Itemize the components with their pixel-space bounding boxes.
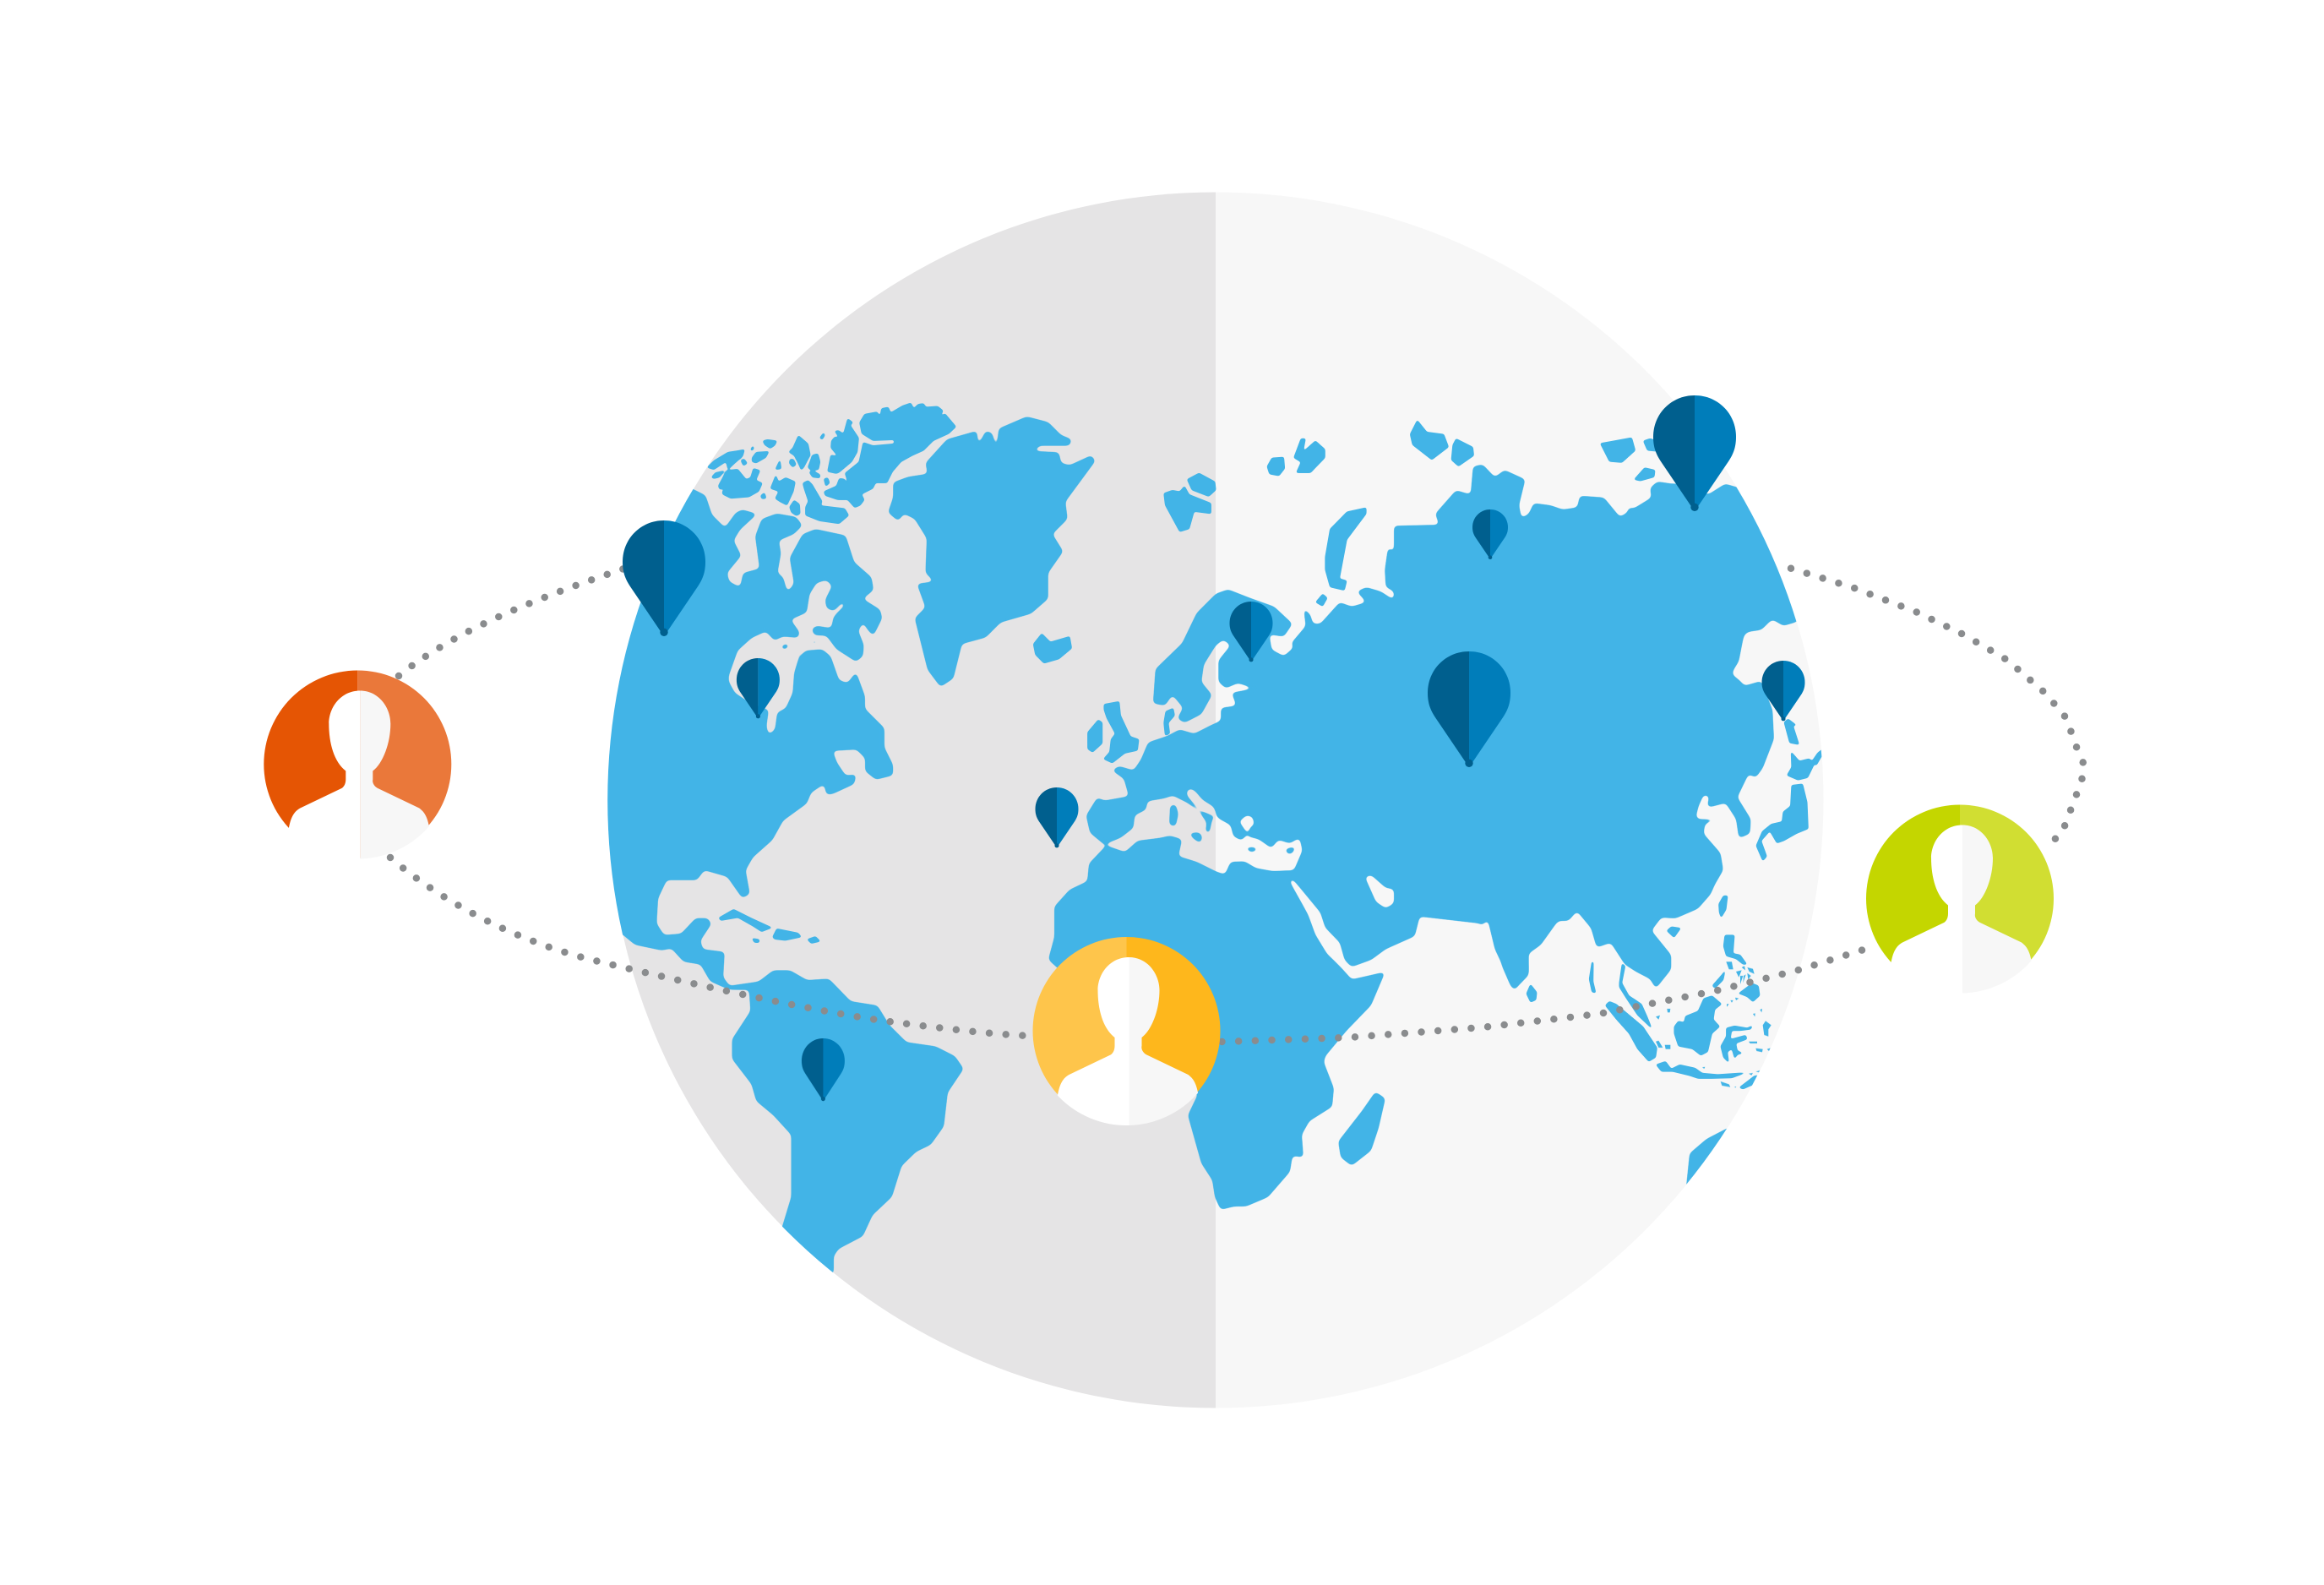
map pin: Hudson Bay xyxy=(737,658,780,718)
Borneo xyxy=(1674,995,1722,1055)
dotted orbit: rear right arc xyxy=(1791,569,2083,844)
Severnaya Zemlya xyxy=(1410,420,1449,460)
map pin: northern Siberia xyxy=(1472,509,1508,559)
Kolguev xyxy=(1316,594,1327,607)
Mindanao xyxy=(1738,983,1760,1002)
Honshu xyxy=(1756,784,1809,861)
Central and South America xyxy=(622,918,963,1272)
islands and archipelagos xyxy=(707,403,1824,1089)
avatar: green person xyxy=(1866,804,2054,994)
Canadian Arctic islands xyxy=(707,449,745,470)
Greenland xyxy=(888,417,1096,687)
world map continents xyxy=(548,403,1824,1276)
Great Britain xyxy=(1103,701,1139,763)
Palawan xyxy=(1712,969,1726,989)
Svalbard xyxy=(1163,486,1211,532)
Luzon xyxy=(1723,935,1747,965)
Eurasia xyxy=(1086,464,1798,990)
Iceland xyxy=(1033,633,1072,663)
Taiwan xyxy=(1718,896,1728,918)
map pin: South America xyxy=(802,1038,845,1101)
Ellesmere and Baffin xyxy=(824,403,956,508)
Kuril chain xyxy=(1812,748,1824,765)
Timor xyxy=(1739,1076,1760,1089)
Denmark xyxy=(1163,708,1175,736)
Sumatra xyxy=(1605,1001,1657,1062)
Puerto Rico xyxy=(807,936,820,944)
dotted orbit: rear left arc xyxy=(399,559,652,676)
Sri Lanka xyxy=(1527,984,1537,1002)
Africa xyxy=(1048,760,1385,1210)
Cuba xyxy=(719,909,772,932)
avatar: yellow person xyxy=(1032,937,1220,1125)
Ireland xyxy=(1087,720,1102,753)
Sakhalin xyxy=(1784,719,1799,745)
map pin: far east Russia xyxy=(1653,395,1736,511)
map pin: western Canada xyxy=(623,520,705,636)
map pin: Atlantic near Iberia xyxy=(1036,787,1078,847)
Malay Peninsula xyxy=(1619,963,1652,1029)
Novaya Zemlya xyxy=(1325,508,1366,591)
Java xyxy=(1656,1061,1747,1079)
North America xyxy=(607,488,894,937)
New Siberian Islands xyxy=(1600,438,1636,463)
Madagascar xyxy=(1338,1092,1385,1166)
globe xyxy=(608,193,1823,1408)
Franz Josef Land xyxy=(1267,457,1285,476)
Hainan xyxy=(1667,927,1681,938)
avatar: orange person xyxy=(264,671,451,859)
small Southeast Asian islands xyxy=(1656,961,1772,1087)
map pin: Scandinavia xyxy=(1230,602,1272,662)
Hispaniola xyxy=(772,929,802,940)
Jamaica xyxy=(752,938,759,943)
world map infographic xyxy=(264,193,2087,1408)
Andaman Islands xyxy=(1589,961,1596,994)
Sulawesi xyxy=(1721,1025,1753,1063)
East Asia xyxy=(1394,483,1816,990)
dotted orbit: front arc across the globe xyxy=(390,858,1877,1042)
map pin: Russian Pacific coast xyxy=(1762,661,1804,721)
Wrangel Island xyxy=(1634,467,1655,481)
map pin: central Asia xyxy=(1428,651,1510,767)
Hokkaido xyxy=(1787,751,1815,781)
Australia edge xyxy=(1686,1128,1774,1225)
